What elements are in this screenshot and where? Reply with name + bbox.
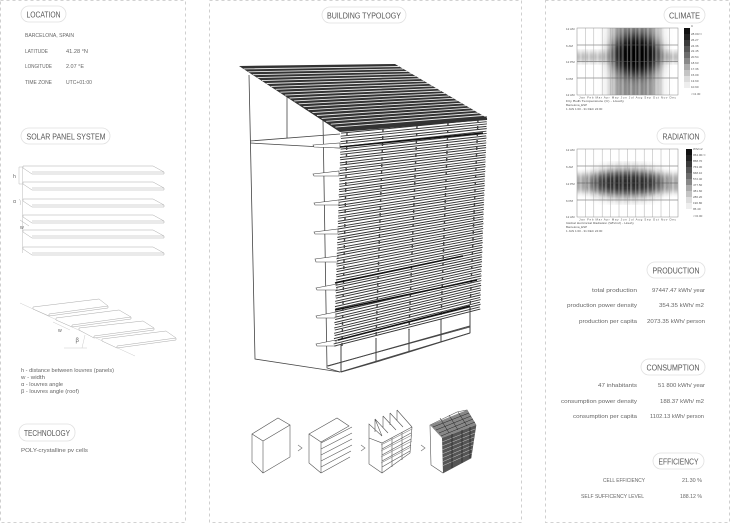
text: louvre legend: β - louvres angle (roof)	[21, 389, 79, 395]
illustration: building axonometric	[239, 64, 487, 372]
heading: climate: CLIMATE	[669, 12, 700, 20]
heading: radiation: RADIATION	[662, 132, 700, 142]
text: production figures: 354.35 kWh/ m2	[659, 303, 704, 309]
heading: location: LOCATION	[26, 10, 61, 20]
caption: radiation chart	[566, 221, 635, 233]
heat map: dry bulb temperature: Jan Feb Mar Apr May Jun Jul Aug Sep Oct Nov Dec	[579, 96, 676, 100]
building walls and frame	[249, 75, 470, 372]
text: consumption figures: consumption power density	[561, 399, 637, 405]
text: production figures: production power density	[567, 303, 637, 309]
heat map: dry bulb temperature: 6 PM	[566, 77, 574, 81]
heading: consumption: CONSUMPTION	[646, 364, 700, 372]
text: production figures: 97447.47 kWh/ year	[652, 288, 705, 294]
panel: consumption	[561, 359, 705, 420]
heading: building typology	[322, 7, 406, 23]
text: location details: 41.28 °N	[66, 49, 88, 55]
legend: radiation scale: 572.40	[693, 177, 703, 181]
heat map: global horizontal radiation: 6 PM	[566, 199, 574, 203]
heat map: dry bulb temperature: 6 AM	[566, 44, 573, 48]
panel: climate	[566, 7, 705, 115]
caption: climate chart: 1 JAN 1:00 - 31 DEC 24:00	[566, 107, 603, 111]
legend: temperature scale: 22.45	[691, 49, 699, 53]
text: location details: UTC+01:00	[66, 80, 92, 86]
panel: efficiency	[581, 453, 704, 500]
legend: temperature scale: C	[691, 24, 694, 28]
heading: consumption	[641, 359, 705, 375]
arrow 3	[421, 445, 425, 451]
legend: temperature scale: 20.54	[691, 55, 699, 59]
legend: radiation scale: 858.70	[693, 159, 703, 163]
arrow 1	[298, 445, 302, 451]
step 4: complete building	[430, 410, 476, 473]
heat map: dry bulb temperature: 12 PM	[566, 60, 575, 64]
panel: production	[567, 262, 705, 325]
text: location details: LONGITUDE	[25, 64, 52, 70]
heading: technology: TECHNOLOGY	[24, 429, 71, 438]
text: consumption figures: 1102.13 kWh/ person	[650, 414, 704, 420]
panel: radiation	[566, 128, 706, 233]
text: technology description: POLY-crystalline pv cells	[21, 448, 88, 454]
text: production figures	[567, 288, 705, 325]
diagram: roof louvres perspective: w	[58, 328, 62, 334]
diagram: louvre section: w	[20, 225, 24, 231]
diagram: roof louvres perspective	[20, 299, 176, 356]
ground level columns	[328, 310, 470, 372]
diagram: roof louvres perspective: β	[76, 338, 80, 344]
text: efficiency figures: CELL EFFICIENCY	[603, 478, 645, 484]
legend: temperature scale: 28.00<=	[691, 32, 702, 36]
heat map: global horizontal radiation: Jan Feb Mar Apr May Jun Jul Aug Sep Oct Nov Dec	[579, 218, 676, 222]
heat map: global horizontal radiation: 12 AM	[566, 148, 575, 152]
legend: temperature scale: 17.36	[691, 67, 699, 71]
panel: technology	[19, 424, 88, 454]
text: efficiency figures: 21.30 %	[682, 478, 702, 484]
text: consumption figures: 51 800 kWh/ year	[658, 383, 705, 389]
text: production figures: 2073.35 kWh/ person	[647, 319, 705, 325]
legend: temperature scale: <=2.30	[691, 92, 701, 96]
building floor plates	[313, 143, 340, 346]
arrow 2	[361, 445, 365, 451]
legend: temperature scale: 18.63	[691, 61, 699, 65]
caption: climate chart: Barcelona_ESP	[566, 103, 587, 107]
panel: right column frame	[546, 0, 730, 522]
legend: radiation scale: 954.00<=	[693, 153, 706, 157]
heading: building typology: BUILDING TYPOLOGY	[327, 12, 402, 20]
legend: radiation scale: <=0.00	[693, 214, 703, 218]
step 1: massing box	[252, 418, 290, 473]
step 2: box with floor plates	[309, 418, 352, 473]
diagram: louvre section	[13, 166, 164, 255]
legend: radiation scale: 477.50	[693, 183, 703, 187]
heading: solar panel system: SOLAR PANEL SYSTEM	[26, 132, 106, 142]
heat map: global horizontal radiation: 6 AM	[566, 165, 573, 169]
text: consumption figures: 188.37 kWh/ m2	[660, 399, 704, 405]
heat map: global horizontal radiation	[566, 148, 685, 222]
diagram: louvre section: h	[13, 174, 16, 180]
text: efficiency figures: SELF SUFFICENCY LEVEL	[581, 494, 644, 500]
legend: temperature scale: 24.36	[691, 44, 699, 48]
text: louvre legend	[21, 368, 114, 395]
text: production figures: production per capita	[579, 319, 637, 325]
legend: radiation scale: Wh/m2	[693, 147, 703, 151]
text: consumption figures	[561, 383, 705, 420]
text: location details: BARCELONA, SPAIN	[25, 33, 74, 39]
legend: radiation scale: 668.10	[693, 171, 703, 175]
legend: temperature scale: 15.09	[691, 73, 699, 77]
text: louvre legend: α - louvres angle	[21, 382, 63, 388]
legend: radiation scale: 95.40	[693, 207, 701, 211]
text: efficiency figures: 188.12 %	[680, 494, 702, 500]
text: efficiency figures	[581, 478, 702, 500]
heading: efficiency: EFFICIENCY	[658, 458, 699, 466]
panel: center column frame	[210, 0, 522, 522]
text: consumption figures: consumption per capita	[573, 414, 637, 420]
text: production figures: total production	[592, 288, 637, 294]
step 3: structural frame with fins	[369, 410, 412, 473]
legend: temperature scale	[684, 24, 702, 96]
legend: temperature scale: 10.90	[691, 85, 699, 89]
heat map: dry bulb temperature	[566, 28, 678, 99]
caption: climate chart: Dry Bulb Temperature (C) - Hourly	[566, 99, 625, 103]
text: louvre legend: h - distance between louvres (panels)	[21, 368, 114, 374]
legend: radiation scale: 381.60	[693, 189, 703, 193]
diagram: construction sequence	[252, 410, 476, 473]
text: louvre legend: w - width	[21, 375, 45, 381]
heading: solar panel system	[21, 128, 110, 144]
heat map: dry bulb temperature: 12 AM	[566, 27, 575, 31]
heat map: dry bulb temperature: 12 AM	[566, 93, 575, 97]
heat map: global horizontal radiation: 12 AM	[566, 215, 575, 219]
legend: radiation scale	[686, 147, 706, 218]
panel: location	[21, 6, 92, 86]
legend: radiation scale: 190.80	[693, 201, 703, 205]
caption: climate chart	[566, 99, 625, 111]
caption: radiation chart: Barcelona_ESP	[566, 225, 587, 229]
text: location details	[25, 33, 92, 86]
text: location details: TIME ZONE	[25, 80, 53, 86]
caption: radiation chart: 1 JAN 1:00 - 31 DEC 24:00	[566, 229, 603, 233]
sloped solar roof	[239, 64, 487, 132]
text: consumption figures: 47 inhabitants	[598, 383, 637, 389]
legend: radiation scale: 286.20	[693, 195, 703, 199]
facade louvres	[334, 118, 487, 346]
text: location details: 2.07 °E	[66, 64, 85, 70]
text: location details: LATITUDE	[25, 49, 48, 55]
legend: temperature scale: 13.60	[691, 79, 699, 83]
legend: radiation scale: 763.30	[693, 165, 703, 169]
legend: temperature scale: 26.27	[691, 38, 699, 42]
heat map: global horizontal radiation: 12 PM	[566, 182, 575, 186]
diagram: louvre section: α	[13, 199, 16, 205]
caption: radiation chart: Global Horizontal Radiation (Wh/m2) - Hourly	[566, 221, 635, 225]
heading: production: PRODUCTION	[652, 266, 700, 276]
panel: solar panel system	[13, 128, 176, 395]
panel: left column frame	[0, 0, 186, 522]
